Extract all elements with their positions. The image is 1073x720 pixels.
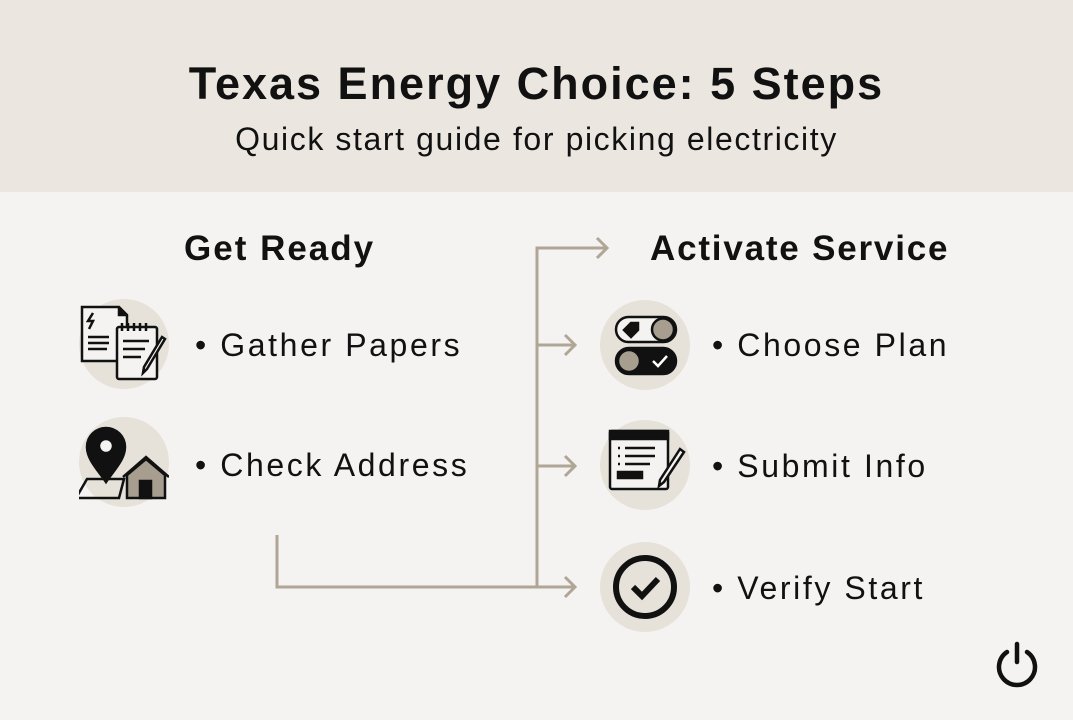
icon: toggles xyxy=(600,300,690,390)
subtitle: Quick start guide for picking electricity xyxy=(235,121,838,157)
title: Texas Energy Choice: 5 Steps xyxy=(189,58,884,109)
header band xyxy=(0,0,1073,192)
icon: papers xyxy=(79,299,169,389)
icon: check circle xyxy=(600,542,690,632)
item: Gather Papers: • Gather Papers xyxy=(195,327,462,363)
icon: power xyxy=(996,642,1038,688)
item: Check Address: • Check Address xyxy=(195,447,469,483)
heading: Activate Service: Activate Service xyxy=(650,229,949,268)
item: Verify Start: • Verify Start xyxy=(712,570,925,606)
heading: Get Ready: Get Ready xyxy=(184,229,375,268)
item: Submit Info: • Submit Info xyxy=(712,448,928,484)
item: Choose Plan: • Choose Plan xyxy=(712,327,949,363)
icon: form xyxy=(600,420,690,510)
icon: map pin house xyxy=(79,417,169,507)
